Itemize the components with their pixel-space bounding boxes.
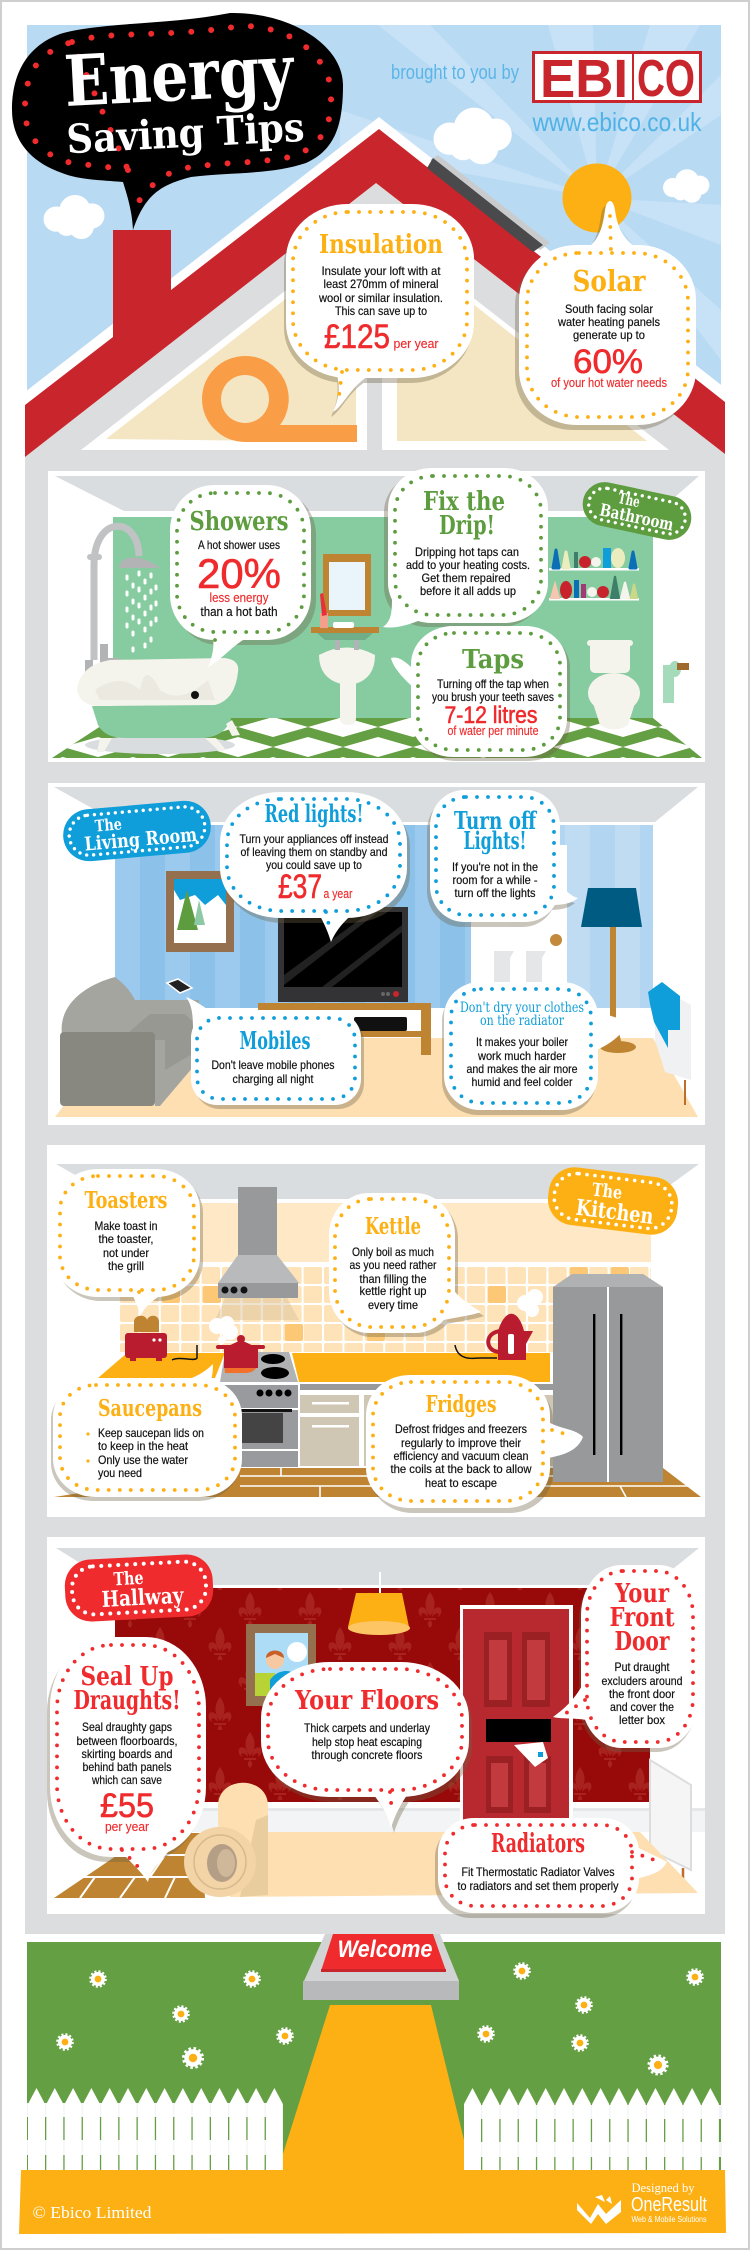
shelves and bottles [549,548,639,600]
bubble: Don't dry your clothes: humid and feel colder [472,1075,572,1089]
sofa [60,977,199,1106]
bubble: Your Floors: Thick carpets and underlay [304,1721,430,1735]
bubble: Insulation: This can save up to [335,304,427,318]
checkered floor [52,718,702,758]
bubble: Your Front Door: and cover the [610,1700,674,1714]
worktop [98,1353,550,1382]
bubble: Toasters: not under [103,1246,149,1260]
bubble: Fix the Drip: Get them repaired [422,571,510,585]
wooden floor [54,1833,205,1898]
bubble: Fridges: the coils at the back to allow [390,1462,532,1476]
ceiling [55,476,699,511]
bubble: Solar: 60% [573,343,643,381]
bubble: Showers: 20% [197,550,281,597]
ceiling [56,1548,699,1585]
title: Energy: Energy [62,28,297,123]
bubble: Taps [391,626,570,761]
designer credit: Web & Mobile Solutions [632,2215,706,2224]
label: The Bathroom [579,478,695,544]
picture [246,1624,316,1706]
bubble: Seal Up Draughts: between floorboards, [76,1734,178,1748]
fence: left [27,2088,283,2172]
bubble: Turn off Lights: room for a while - [452,873,538,887]
bubble: Fix the Drip: Dripping hot taps can [415,545,519,559]
bubble: Fix the Drip: Drip! [439,511,495,541]
label: The Hallway: The [113,1568,144,1590]
bubble: Seal Up Draughts: Draughts! [74,1686,180,1716]
logo: Ebico: EBI [540,49,628,109]
label: The Living Room [61,799,213,863]
floor [55,1038,698,1117]
bubble: Fridges: Fridges [426,1391,496,1418]
wooden floor [54,1468,701,1497]
bubble: Your Front Door: Front [610,1603,674,1633]
green wall [113,517,653,723]
bubble: Seal Up Draughts: Seal draughty gaps [82,1720,172,1734]
title bubble [12,13,343,230]
toilet [587,640,640,730]
skirting [115,1808,705,1811]
bubble: Red lights: you could save up to [266,858,362,872]
bubble: Kettle: kettle right up [360,1284,427,1298]
bubble: Radiators [435,1818,667,1918]
label: The Hallway: Hallway [101,1583,185,1613]
bubble: Solar: of your hot water needs [551,375,667,390]
sun [562,164,632,232]
bubble: Red lights: Turn your appliances off instead [240,832,388,846]
bubble: Turn off Lights: Turn off [454,806,537,835]
radiator [650,1760,691,1885]
ceiling [54,787,698,822]
bubble: Fridges: regularly to improve their [401,1436,521,1450]
designer credit [577,2180,707,2224]
bubble: Kettle: than filling the [360,1272,427,1286]
bubble: Don't dry your clothes: Don't dry your clothes [460,1000,584,1016]
carpet [184,1783,698,1897]
cooker hood [215,1187,299,1320]
bubble: Radiators: Fit Thermostatic Radiator Valves [462,1865,614,1879]
letterbox and letter [486,1719,551,1767]
bubble: Insulation: wool or similar insulation. [318,291,443,305]
bubble: Seal Up Draughts: £55 [100,1787,154,1825]
bubble: Don't dry your clothes: and makes the air more [466,1062,578,1076]
bubble: Red lights: Red lights! [264,799,364,828]
bubble: Toasters: Make toast in [94,1219,158,1233]
bubble: Showers: A hot shower uses [198,538,280,552]
wallpaper [115,1588,650,1802]
bubble: Insulation [284,204,474,417]
cloud [663,169,709,203]
bubble: Saucepans [51,1364,242,1501]
taps [85,644,120,682]
solar panel [427,155,550,252]
bubble: Kettle: Kettle [365,1213,421,1240]
bubble: Insulation: Insulate your loft with at [322,264,441,278]
logo: Ebico [532,49,702,109]
website: www.ebico.co.uk [532,107,702,137]
panel: living room [48,783,705,1125]
bubble: Your Floors: Your Floors [294,1686,439,1716]
bubble: Showers: than a hot bath [200,604,278,619]
bubble: Taps: 7-12 litres [444,702,538,729]
label: The Bathroom: Bathroom [598,500,675,536]
bubble: Turn off Lights [427,790,578,927]
bubble: Mobiles: Mobiles [240,1026,310,1055]
ceiling [56,1164,699,1199]
bubble: Fridges [366,1375,583,1513]
kettle and steam [455,1289,543,1360]
bubble: Your Floors: help stop heat escaping [312,1735,422,1749]
bubble: Fridges: efficiency and vacuum clean [394,1449,528,1463]
bubble: Showers [170,485,316,667]
wallpaper [115,825,653,1008]
sink and shelf [311,627,379,725]
bubble: Solar [515,201,696,430]
bubble: Taps: you brush your teeth saves [432,690,554,704]
bubble: Seal Up Draughts [47,1637,206,1882]
insulation roll [202,356,357,442]
bubble: Toasters: the toaster, [98,1232,154,1246]
bath [77,658,240,754]
label: The Bathroom: The [616,489,642,511]
bubble: Turn off Lights: turn off the lights [454,886,536,900]
bubble: Your Front Door: Put draught [614,1660,670,1674]
bubble: Toasters: the grill [108,1259,144,1273]
bubble: Taps: of water per minute [448,723,538,738]
house body [25,183,725,1934]
bubble: Fridges: heat to escape [425,1476,497,1490]
bubble: Don't dry your clothes: on the radiator [480,1013,564,1029]
bubble: Your Floors [261,1662,472,1833]
bubble: Seal Up Draughts: Seal Up [80,1662,174,1692]
bubble: Taps: Turning off the tap when [437,677,549,691]
bubble: Kettle [329,1193,484,1337]
bubble: Kettle: Only boil as much [352,1245,434,1259]
bubble: Saucepans: you need [98,1466,142,1480]
bubble: Red lights: £37 [278,868,322,906]
saucepan and steam [209,1316,265,1373]
designer credit: OneResult [631,2194,707,2216]
bubble: Kettle: every time [368,1298,418,1312]
tiles [120,1267,651,1352]
bubble: Mobiles: Don't leave mobile phones [212,1058,334,1072]
bubble: Solar: South facing solar [565,302,653,316]
bubble: Your Floors: through concrete floors [312,1748,422,1762]
toaster [125,1316,197,1361]
bubble: Saucepans: Keep saucepan lids on [98,1426,204,1440]
bubble: Showers: Showers [190,507,288,537]
bubble: Kettle: as you need rather [350,1258,436,1272]
bubble: Your Front Door: Door [614,1627,670,1657]
label: The Kitchen: Kitchen [574,1195,655,1230]
bubble: Solar: Solar [572,264,646,298]
hob [220,1352,298,1382]
shower [87,526,160,660]
bubble: Fix the Drip: add to your heating costs. [406,558,530,572]
bubble: Seal Up Draughts: behind bath panels [82,1760,172,1774]
designer credit: Designed by [632,2180,695,2195]
television [278,907,408,1002]
toilet roll [663,661,689,703]
lamp [348,1572,410,1635]
bubble: Your Front Door: excluders around [602,1674,682,1688]
bubble: Turn off Lights: Lights! [464,826,526,855]
garden path [282,2005,464,2172]
bubble: Mobiles: charging all night [232,1072,314,1086]
label: The Living Room: Living Room [84,824,198,856]
bubble: Red lights: of leaving them on standby and [240,845,388,859]
bubble: Seal Up Draughts: per year [105,1819,150,1834]
bubble: Your Front Door: letter box [619,1713,665,1727]
loft [81,227,669,450]
cloud [434,108,512,164]
bubble: Seal Up Draughts: which can save [91,1773,162,1787]
bubble: Turn off Lights: If you're not in the [452,860,538,874]
welcome mat [321,1934,446,1972]
bubble: Fix the Drip: Fix the [423,487,505,517]
bubble: Toasters [54,1169,203,1315]
bubble: Don't dry your clothes: It makes your boiler [476,1035,568,1049]
bubble: Your Front Door [553,1565,699,1752]
label: The Kitchen: The [591,1179,623,1204]
title: Saving Tips: Saving Tips [65,104,305,163]
oven [220,1385,298,1467]
logo: Ebico: CO [637,50,695,108]
lamp [581,888,642,1053]
tv stand [258,1003,431,1055]
bubble: Showers: less energy [210,590,269,605]
bubble: Insulation: £125 [324,318,390,356]
fence: right [464,2088,722,2172]
label: The Kitchen [545,1164,681,1238]
bubble: Taps: Taps [462,645,524,675]
cabinets [300,1384,554,1466]
picture [166,871,234,952]
cream wall [117,1203,651,1262]
bubble: Red lights: a year [324,886,353,901]
label: The Hallway [63,1553,215,1623]
footer band [19,2170,726,2234]
bubble: Fix the Drip: before it all adds up [420,584,516,598]
bubble: Mobiles [186,997,364,1109]
bubble: Don't dry your clothes: work much harder [477,1049,566,1063]
bubble: Radiators: to radiators and set them properly [458,1879,618,1893]
radiator and clothes [648,982,691,1105]
bubble: Your Front Door: Your [614,1579,669,1609]
fridge [553,1274,663,1482]
toothbrush and toothpaste [320,593,354,628]
bubble: Toasters: Toasters [84,1187,168,1214]
bubble: Don't dry your clothes [442,982,629,1115]
tablet [167,979,192,993]
bubble: Saucepans: to keep in the heat [98,1439,189,1453]
door [460,1605,573,1827]
flowers [57,1963,703,2074]
cloud [44,195,104,239]
brought to you by: brought to you by [391,62,519,84]
copyright: © Ebico Limited [32,2203,152,2222]
bubble: Fix the Drip [383,468,548,628]
bubble: Red lights [220,792,410,942]
garden lawn [27,1942,721,2172]
bubble: Solar: generate up to [573,328,645,342]
door [471,845,567,985]
panel: hallway [47,1537,705,1914]
bubble: Seal Up Draughts: skirting boards and [82,1747,172,1761]
bubble: Your Front Door: the front door [609,1687,675,1701]
bubble: Fridges: Defrost fridges and freezers [395,1422,527,1436]
doorstep [303,1934,459,2000]
mirror [323,554,371,616]
bubble: Solar: water heating panels [557,315,660,329]
bubble: Saucepans: Saucepans [98,1395,202,1422]
roof [25,117,725,500]
label: The Living Room: The [94,814,123,836]
panel: kitchen [47,1145,705,1517]
bubble: Insulation: per year [394,336,439,351]
bubble: Saucepans: Only use the water [98,1453,188,1467]
bubble: Insulation: least 270mm of mineral [324,277,438,291]
sky [27,25,721,405]
bubble: Radiators: Radiators [491,1829,585,1859]
bubble: Insulation: Insulation [319,230,443,260]
welcome mat: Welcome [338,1936,432,1963]
panel: bathroom [48,471,705,762]
